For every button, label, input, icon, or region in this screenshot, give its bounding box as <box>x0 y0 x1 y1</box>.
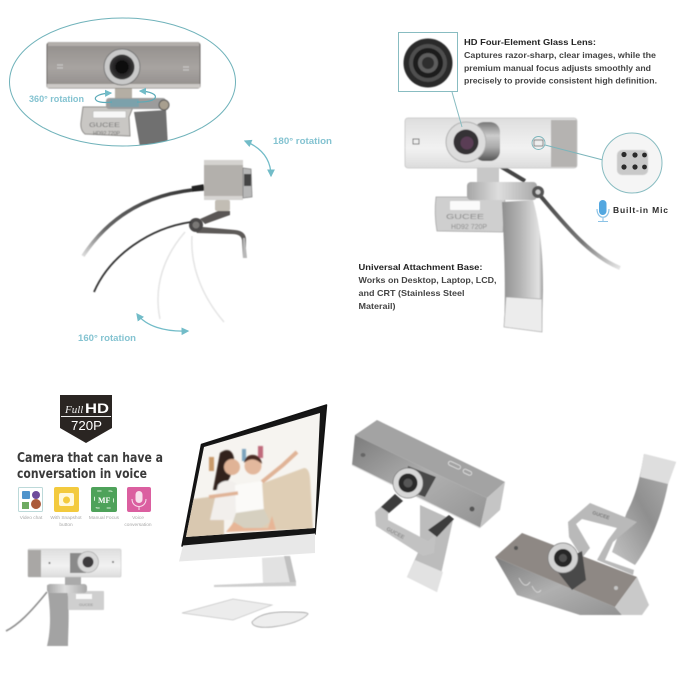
icon captions: button <box>59 522 73 528</box>
panel: angled webcam left: GUCEE <box>385 526 405 541</box>
webcam large front view: HD92 720P <box>451 224 487 231</box>
strap <box>612 454 676 565</box>
small webcam: GUCEE <box>79 602 94 607</box>
icon captions: conversation <box>124 522 152 528</box>
panel: HD badge and features <box>6 395 163 646</box>
label: 360 rotation: 360° rotation <box>29 94 84 104</box>
icon: video chat <box>18 488 42 512</box>
lens <box>405 466 436 497</box>
text block: attachment base: Universal Attachment Base: <box>358 262 483 272</box>
webcam large front view: GUCEE <box>446 214 484 221</box>
panel: rotation views <box>10 18 332 344</box>
callout text: lens description: premium manual focus adjusts smoothly and <box>464 63 651 73</box>
icon: manual focus <box>91 487 117 512</box>
callout text: lens description: precisely to provide consistent high definition. <box>464 76 657 86</box>
icon: snapshot button <box>54 487 79 512</box>
icon captions: Video chat <box>20 515 43 521</box>
camera body <box>352 435 487 528</box>
panel: desktop monitor <box>179 405 326 627</box>
badge: Full HD 720P: Full <box>64 404 83 416</box>
camera body side <box>204 160 243 200</box>
webcam front view: GUCEE <box>89 123 120 129</box>
strap ghost positions <box>158 232 224 322</box>
heading: camera conversation <box>17 451 163 482</box>
text block: attachment base <box>358 262 496 311</box>
monitor stand <box>214 556 296 587</box>
icon: voice conversation <box>127 487 151 512</box>
hinge and bracket <box>215 200 230 211</box>
panel: lens and mic details <box>358 32 668 332</box>
webcam large front view <box>405 118 620 332</box>
panel: angled webcam right <box>495 454 676 615</box>
monitor chin <box>179 534 315 562</box>
panel: angled webcam right: GUCEE <box>591 510 611 522</box>
icon captions: Voice <box>132 515 144 521</box>
lens <box>104 49 140 85</box>
panel: angled webcam left <box>352 420 505 592</box>
callout: glass lens inset <box>398 32 462 127</box>
text block: attachment base: Materail) <box>358 301 396 311</box>
callout text: lens description: Captures razor-sharp, clear images, while the <box>464 50 656 60</box>
label: 180 rotation: 180° rotation <box>273 136 332 147</box>
label: built-in mic: Built-in Mic <box>613 205 668 215</box>
bracket <box>375 494 436 556</box>
badge: Full HD 720P: 720P <box>71 419 102 433</box>
text block: attachment base: Works on Desktop, Laptop, LCD, <box>358 275 496 285</box>
icon captions: With Snapshot <box>50 515 82 521</box>
callout: 360 degree rotation ellipse <box>10 18 236 147</box>
bracket <box>568 503 637 575</box>
webcam front view: HD92 720P <box>93 131 120 137</box>
lens <box>553 551 586 590</box>
callout text: lens description: HD Four-Element Glass Lens: <box>464 37 596 47</box>
webcam side view with tilt arcs <box>78 136 332 344</box>
small webcam <box>6 549 121 646</box>
label: 160 rotation: 160° rotation <box>78 333 136 344</box>
heading: camera conversation: Camera that can have a <box>17 451 163 466</box>
monitor body <box>182 405 326 546</box>
cable <box>83 189 204 256</box>
text block: attachment base: and CRT (Stainless Steel <box>358 288 464 298</box>
strap solid <box>94 222 191 292</box>
icon captions <box>20 515 152 528</box>
icon: microphone <box>597 200 609 222</box>
heading: camera conversation: conversation in voice <box>17 467 147 482</box>
monitor screen photo <box>186 413 320 537</box>
mouse <box>252 612 308 627</box>
camera body <box>495 557 622 615</box>
badge: Full HD 720P <box>60 395 112 443</box>
badge: Full HD 720P: HD <box>85 400 109 416</box>
icon: manual focus: MF <box>98 496 111 505</box>
strap <box>407 505 453 592</box>
keyboard trackpad <box>182 599 272 620</box>
callout text: lens description <box>464 37 657 86</box>
callout: microphone detail <box>532 133 662 193</box>
webcam front view <box>47 42 200 147</box>
icon captions: Manual Focus <box>89 515 120 521</box>
